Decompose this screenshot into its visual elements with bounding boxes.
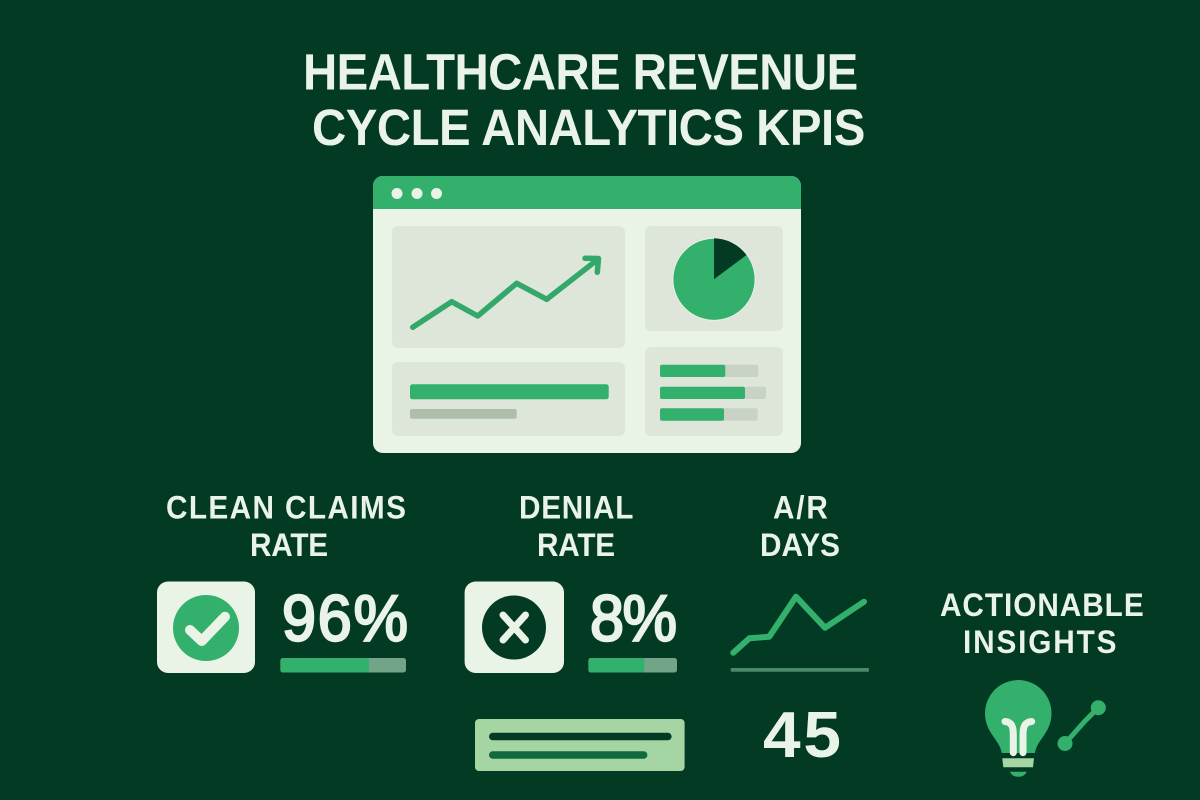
heading: clean claims rate [166, 490, 406, 563]
chart: A/R days trend line [731, 597, 869, 672]
title [303, 44, 865, 156]
icon: check mark [157, 582, 255, 673]
heading: actionable insights: INSIGHTS [963, 624, 1116, 660]
panel: dashboard window [373, 176, 801, 453]
heading: actionable insights [940, 587, 1144, 660]
heading: denial rate: DENIAL [519, 490, 633, 526]
title: HEALTHCARE REVENUE [303, 44, 858, 101]
stat: denial 8%: 8% [590, 583, 677, 655]
stat: A/R days 45: 45 [763, 699, 841, 772]
heading: A/R days [760, 490, 840, 563]
window header bar [373, 176, 801, 209]
horizontal bars panel [645, 347, 783, 436]
icon: light bulb [985, 680, 1052, 777]
title: CYCLE ANALYTICS KPIS [312, 99, 865, 156]
icon: cross mark [465, 582, 564, 673]
progress bar panel [392, 362, 625, 436]
heading: denial rate [519, 490, 633, 563]
stat: clean claims 96%: 96% [282, 583, 408, 655]
heading: clean claims rate: RATE [250, 527, 328, 563]
heading: A/R days: A/R [773, 490, 828, 526]
progress bar: 8% [588, 658, 677, 672]
icon: connected nodes [1058, 700, 1106, 751]
line chart panel [392, 226, 625, 348]
pie chart panel [645, 226, 783, 331]
heading: A/R days: DAYS [760, 527, 840, 563]
heading: actionable insights: ACTIONABLE [940, 587, 1144, 623]
card: text lines [475, 719, 685, 771]
heading: denial rate: RATE [537, 527, 615, 563]
heading: clean claims rate: CLEAN CLAIMS [166, 490, 406, 526]
progress bar: 96% [280, 658, 406, 672]
